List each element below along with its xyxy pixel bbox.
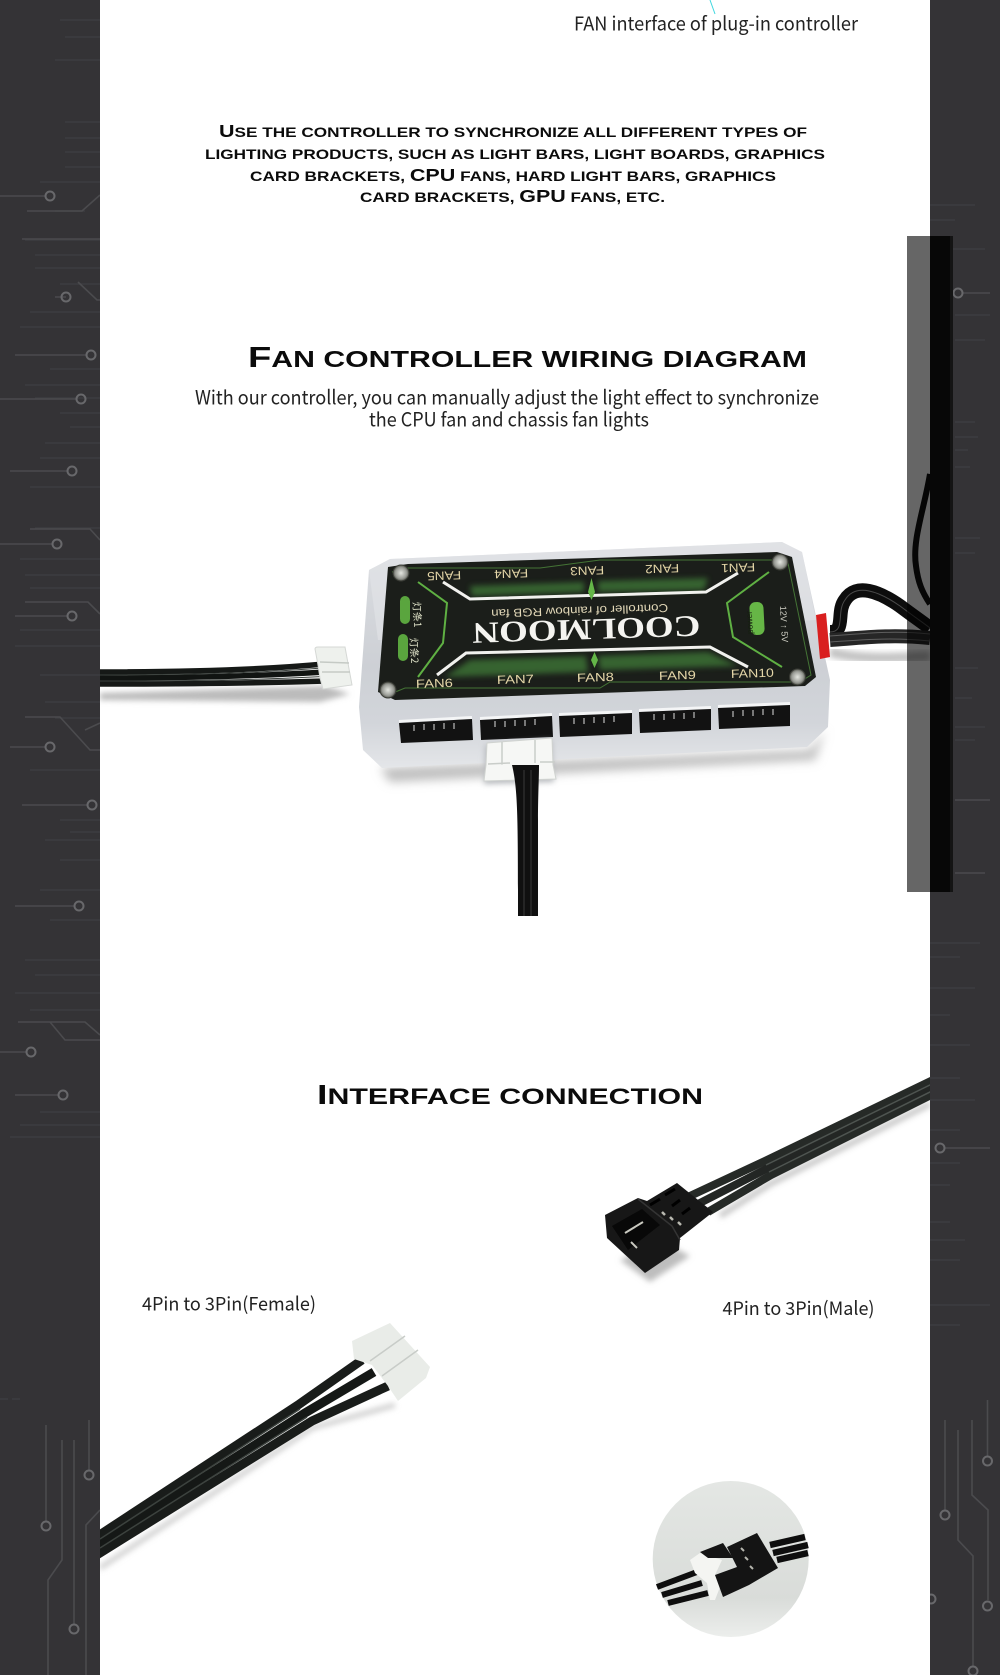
black bar	[930, 236, 953, 892]
fan labels upper row	[427, 560, 755, 583]
caption: male connector: 4Pin to 3Pin(Male)	[722, 1295, 874, 1321]
corner screws	[380, 554, 806, 698]
diagram: left cable and connector	[100, 647, 352, 702]
fan labels upper row: FAN1	[721, 560, 755, 575]
intro paragraph: CARD BRACKETS, CPU FANS, HARD LIGHT BARS, GRAPHICS	[250, 165, 776, 185]
fan labels lower row: FAN10	[731, 666, 774, 681]
power pill	[744, 602, 765, 635]
fan labels upper row: FAN2	[645, 561, 679, 576]
fan labels upper row: FAN5	[427, 568, 461, 583]
diagram: controller unit	[359, 542, 830, 921]
translucent grey bar	[907, 236, 930, 892]
strip labels: 灯条1	[410, 601, 426, 628]
product: male connector with cable	[605, 1079, 935, 1282]
diagram: right power cable loop	[830, 474, 930, 658]
cyan pointer stub	[710, 0, 715, 14]
fan labels upper row: FAN3	[570, 563, 604, 578]
intro paragraph: LIGHTING PRODUCTS, SUCH AS LIGHT BARS, LIGHT BOARDS, GRAPHICS	[205, 146, 825, 162]
fan labels lower row	[416, 666, 774, 691]
enclosure top face highlight	[369, 542, 816, 640]
power pill: power	[744, 611, 755, 634]
white chevrons	[443, 573, 738, 599]
fan labels lower row: FAN7	[497, 672, 534, 687]
fan labels lower row: FAN9	[659, 668, 696, 683]
fan ports	[399, 704, 790, 743]
voltage marks: 12V ↑ 5V	[778, 606, 790, 643]
circuit board	[378, 552, 816, 700]
red power connector	[816, 613, 830, 659]
frosted enclosure	[359, 542, 830, 768]
plugged connector and cable	[484, 738, 556, 921]
caption: FAN interface: FAN interface of plug-in controller	[574, 10, 859, 36]
fan labels lower row: FAN8	[577, 670, 614, 685]
intro paragraph	[205, 121, 825, 206]
right circuit background panel	[926, 0, 1000, 1675]
intro paragraph: CARD BRACKETS, GPU FANS, ETC.	[360, 186, 665, 206]
heading: wiring diagram: FAN CONTROLLER WIRING DIAGRAM	[248, 342, 807, 374]
intro paragraph: USE THE CONTROLLER TO SYNCHRONIZE ALL DIFFERENT TYPES OF	[219, 121, 808, 141]
green glow bands	[445, 578, 738, 677]
inset: mated connectors	[653, 1481, 809, 1637]
controller shadow	[380, 730, 825, 782]
wiring description: With our controller, you can manually adjust the light effect to synchronize	[195, 382, 819, 410]
brand name: COOLMOON	[471, 609, 701, 649]
fan labels lower row: FAN6	[416, 676, 453, 691]
wiring description: the CPU fan and chassis fan lights	[369, 404, 649, 432]
green accent lines	[418, 572, 782, 677]
strip labels	[398, 596, 426, 664]
fan labels upper row: FAN4	[494, 566, 528, 581]
heading: interface connection: INTERFACE CONNECTION	[317, 1079, 703, 1110]
board green outline	[388, 560, 811, 695]
board subtitle: Controller of rainbow RGB fan	[491, 601, 668, 619]
wiring description	[195, 382, 819, 432]
strip labels: 灯条2	[407, 637, 423, 664]
left circuit background panel	[0, 0, 100, 1675]
product: female connector with cable	[95, 1323, 430, 1568]
caption: female connector: 4Pin to 3Pin(Female)	[142, 1290, 316, 1316]
